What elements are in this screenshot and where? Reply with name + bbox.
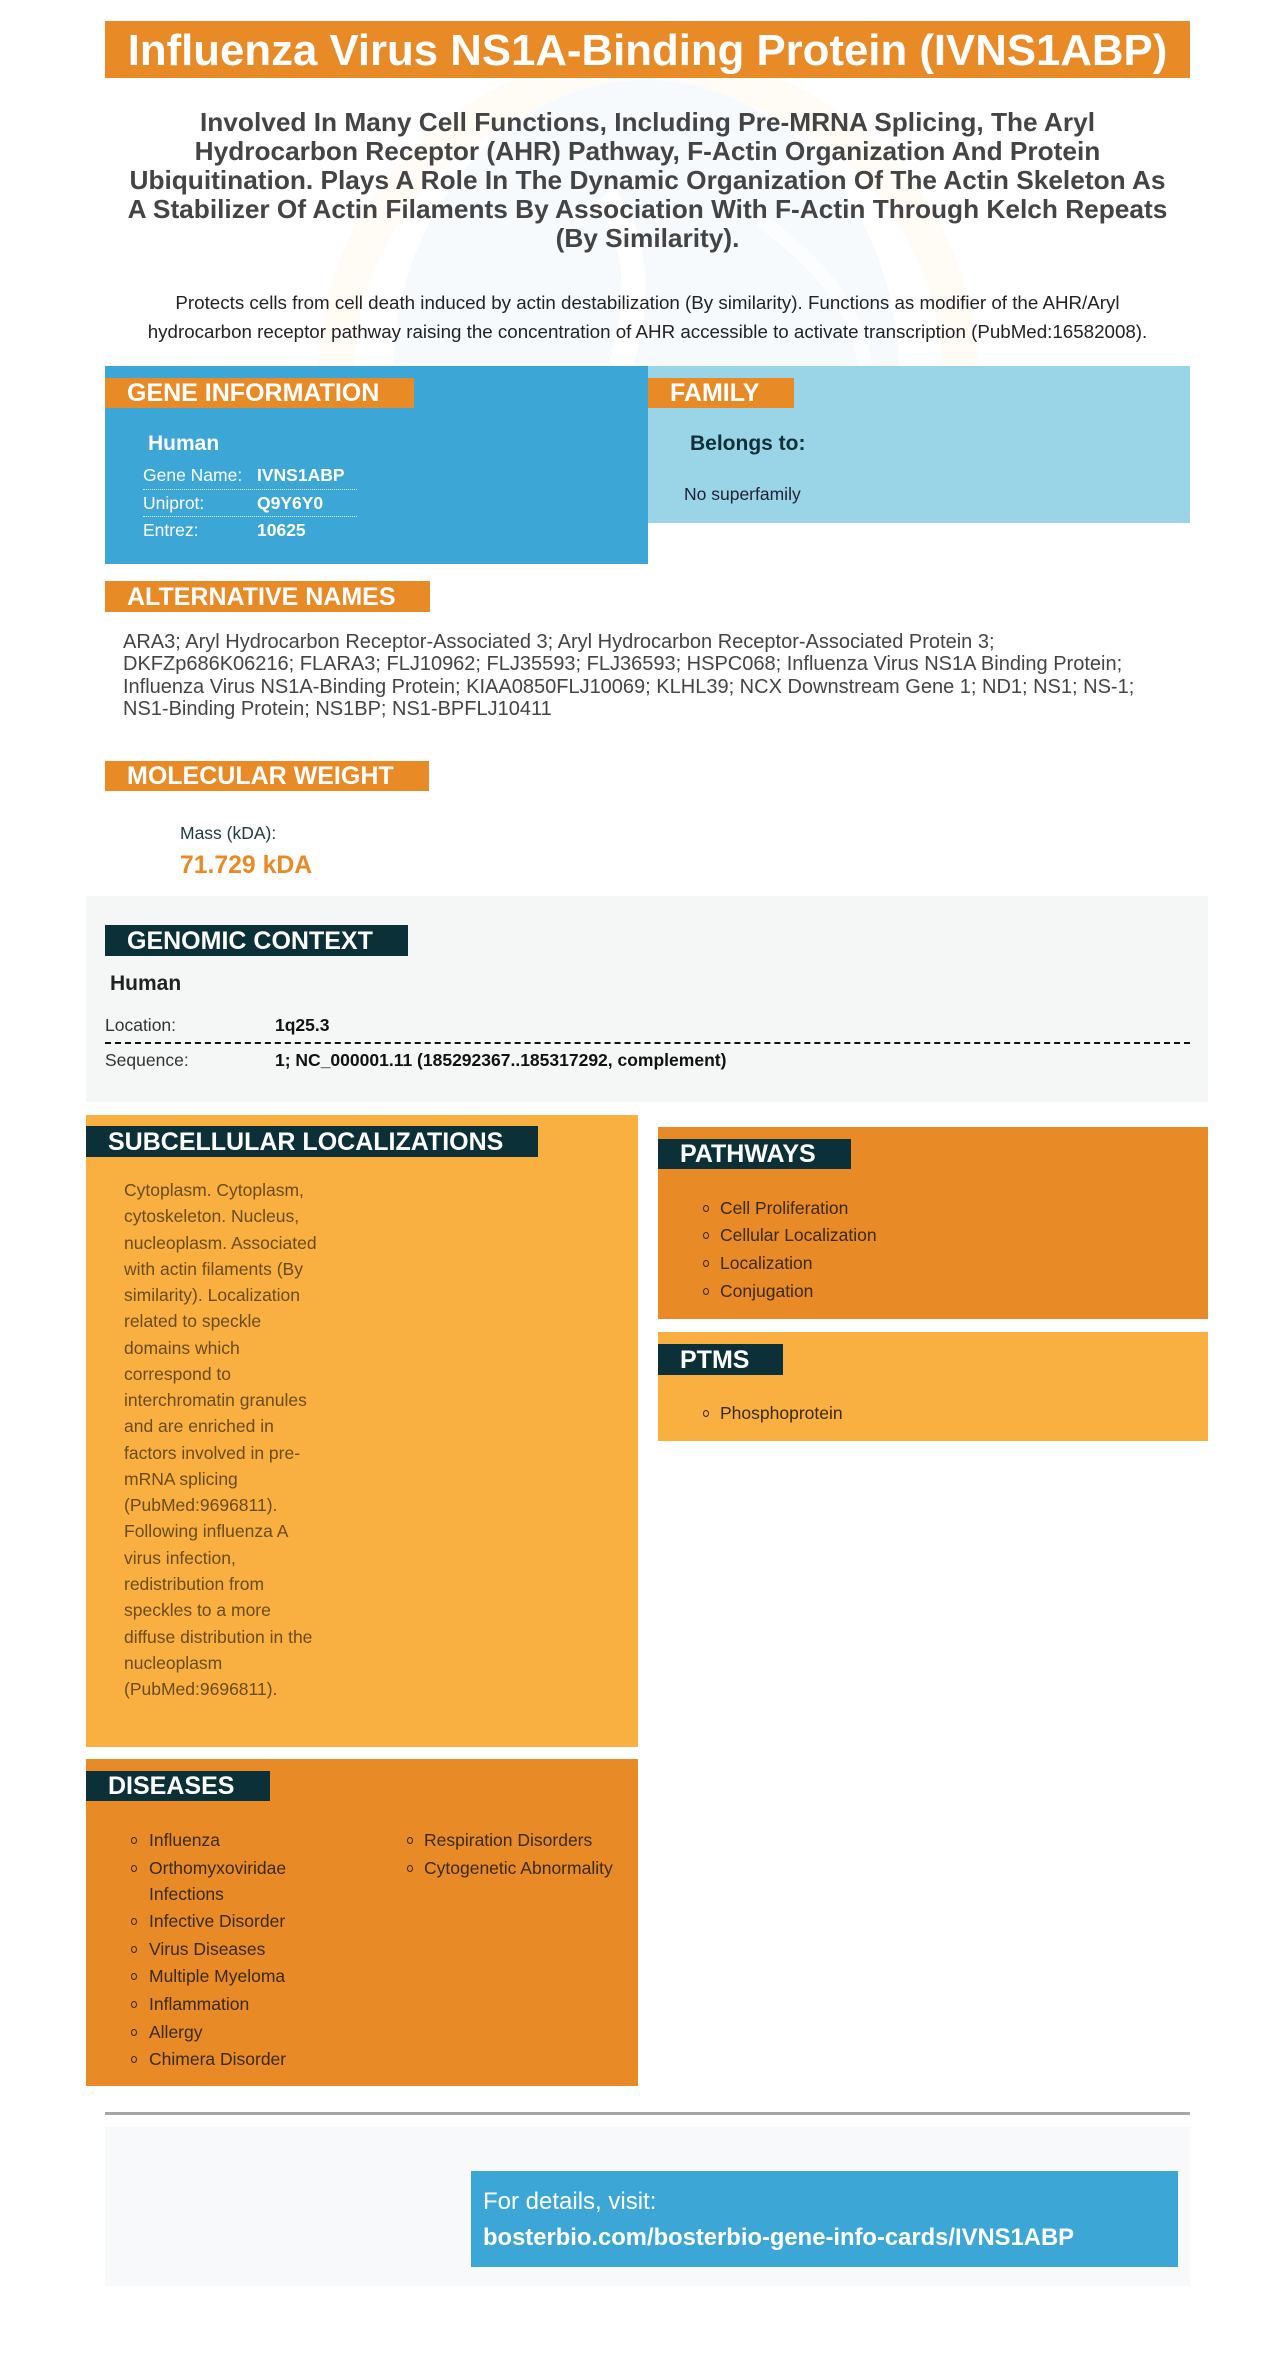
localization text: similarity). Localization — [124, 1285, 300, 1305]
item: Phosphoprotein — [720, 1403, 843, 1423]
heading: family — [648, 378, 794, 408]
heading: pathways: PATHWAYS — [680, 1140, 816, 1168]
description: Protects cells from cell death induced by actin destabilization (By similarity). Functions as modifier of the AHR/Aryl — [175, 292, 1120, 313]
panel: genomic context — [86, 896, 1208, 1102]
uniprot row: Q9Y6Y0 — [257, 493, 323, 513]
localization text: interchromatin granules — [124, 1390, 307, 1410]
localization text — [124, 1180, 317, 1699]
localization text: speckles to a more — [124, 1600, 271, 1620]
panel: genomic context: 1q25.3 — [275, 1015, 329, 1035]
panel: diseases — [86, 1759, 638, 2086]
subtitle — [128, 107, 1167, 253]
item: Influenza — [149, 1830, 220, 1850]
localization text: nucleoplasm. Associated — [124, 1233, 317, 1253]
item: Inflammation — [149, 1994, 249, 2014]
gene name row: Gene Name: — [143, 465, 242, 485]
callout: details link — [471, 2171, 1178, 2267]
item: Conjugation — [720, 1281, 813, 1301]
item: Infective Disorder — [149, 1911, 285, 1931]
description — [148, 292, 1147, 342]
localization text: correspond to — [124, 1364, 231, 1384]
localization text: diffuse distribution in the — [124, 1627, 312, 1647]
localization text: cytoskeleton. Nucleus, — [124, 1206, 299, 1226]
watermark logo — [318, 78, 978, 366]
gene name row: IVNS1ABP — [257, 465, 345, 485]
location row — [105, 1015, 329, 1035]
localization text: with actin filaments (By — [124, 1259, 303, 1279]
alternative names text: ARA3; Aryl Hydrocarbon Receptor-Associated 3; Aryl Hydrocarbon Receptor-Associated Protein 3; — [123, 631, 995, 653]
sequence row: Sequence: — [105, 1050, 189, 1070]
subtitle: Ubiquitination. Plays A Role In The Dynamic Organization Of The Actin Skeleton As — [129, 165, 1166, 195]
description: hydrocarbon receptor pathway raising the concentration of AHR accessible to activate transcription (PubMed:16582008). — [148, 321, 1147, 342]
pathways list — [703, 1198, 877, 1301]
localization text: Cytoplasm. Cytoplasm, — [124, 1180, 304, 1200]
alternative names text: DKFZp686K06216; FLARA3; FLJ10962; FLJ35593; FLJ36593; HSPC068; Influenza Virus NS1A Binding Protein; — [123, 653, 1122, 675]
item: Infections — [149, 1884, 224, 1904]
species: Human — [110, 972, 181, 995]
panel: genomic context: 1; NC_000001.11 (185292367..185317292, complement) — [275, 1050, 726, 1070]
mass value: 71.729 kDA — [180, 852, 312, 879]
entrez row — [143, 520, 306, 540]
heading: gene information: GENE INFORMATION — [127, 379, 379, 407]
item: Respiration Disorders — [424, 1830, 592, 1850]
panel: footer — [105, 2127, 1190, 2286]
localization text: domains which — [124, 1338, 240, 1358]
item: Orthomyxoviridae — [149, 1858, 286, 1878]
item: Virus Diseases — [149, 1939, 265, 1959]
heading: subcellular localizations: SUBCELLULAR LOCALIZATIONS — [108, 1128, 503, 1156]
title: Influenza Virus NS1A-Binding Protein (IVNS1ABP) — [128, 26, 1167, 75]
uniprot row: Uniprot: — [143, 493, 204, 513]
heading: family: FAMILY — [670, 379, 759, 407]
gene name row — [143, 464, 357, 490]
localization text: and are enriched in — [124, 1416, 274, 1436]
heading: diseases: DISEASES — [108, 1772, 234, 1800]
uniprot row — [143, 492, 357, 517]
subtitle: Hydrocarbon Receptor (AHR) Pathway, F-Actin Organization And Protein — [195, 136, 1100, 166]
mass label: Mass (kDA): — [180, 823, 276, 843]
item: Cytogenetic Abnormality — [424, 1858, 613, 1878]
localization text: factors involved in pre- — [124, 1443, 300, 1463]
heading: ptms — [658, 1344, 783, 1375]
location row: Location: — [105, 1015, 176, 1035]
localization text: (PubMed:9696811). — [124, 1495, 277, 1515]
heading: pathways — [658, 1139, 851, 1169]
subtitle: Involved In Many Cell Functions, Including Pre-MRNA Splicing, The Aryl — [200, 107, 1095, 137]
heading: alternative names: ALTERNATIVE NAMES — [127, 583, 396, 611]
sequence row — [105, 1050, 726, 1070]
panel: pathways — [658, 1127, 1208, 1319]
diseases list — [131, 1830, 613, 2069]
item: Cellular Localization — [720, 1225, 877, 1245]
heading: molecular weight: MOLECULAR WEIGHT — [127, 762, 394, 790]
details label: For details, visit: — [483, 2188, 656, 2215]
item: Multiple Myeloma — [149, 1966, 285, 1986]
belongs to: Belongs to: — [690, 432, 806, 455]
panel: ptms — [658, 1332, 1208, 1441]
localization text: redistribution from — [124, 1574, 264, 1594]
heading: diseases — [86, 1771, 270, 1801]
ptms list — [703, 1403, 843, 1423]
localization text: virus infection, — [124, 1548, 236, 1568]
item: Cell Proliferation — [720, 1198, 848, 1218]
heading: ptms: PTMS — [680, 1346, 749, 1374]
localization text: (PubMed:9696811). — [124, 1679, 277, 1699]
panel: family — [648, 366, 1190, 523]
alternative names text — [123, 631, 1134, 720]
details url: bosterbio.com/bosterbio-gene-info-cards/IVNS1ABP — [483, 2224, 1074, 2251]
item: Localization — [720, 1253, 812, 1273]
localization text: related to speckle — [124, 1311, 261, 1331]
alternative names text: Influenza Virus NS1A-Binding Protein; KIAA0850FLJ10069; KLHL39; NCX Downstream Gene 1; ND1; NS1; NS-1; — [123, 676, 1134, 698]
localization text: Following influenza A — [124, 1521, 288, 1541]
entrez row: 10625 — [257, 520, 306, 540]
localization text: nucleoplasm — [124, 1653, 222, 1673]
no superfamily: No superfamily — [684, 484, 801, 504]
item: Allergy — [149, 2022, 202, 2042]
subtitle: (By Similarity). — [556, 223, 739, 253]
alternative names text: NS1-Binding Protein; NS1BP; NS1-BPFLJ10411 — [123, 698, 552, 720]
item: Chimera Disorder — [149, 2049, 286, 2069]
panel: subcellular localizations — [86, 1115, 638, 1747]
dashed separator — [105, 1042, 1190, 1044]
species: Human — [148, 432, 219, 455]
heading: genomic context: GENOMIC CONTEXT — [127, 927, 373, 955]
panel: gene information — [105, 366, 648, 564]
entrez row: Entrez: — [143, 520, 198, 540]
subtitle: A Stabilizer Of Actin Filaments By Association With F-Actin Through Kelch Repeats — [128, 194, 1167, 224]
localization text: mRNA splicing — [124, 1469, 238, 1489]
